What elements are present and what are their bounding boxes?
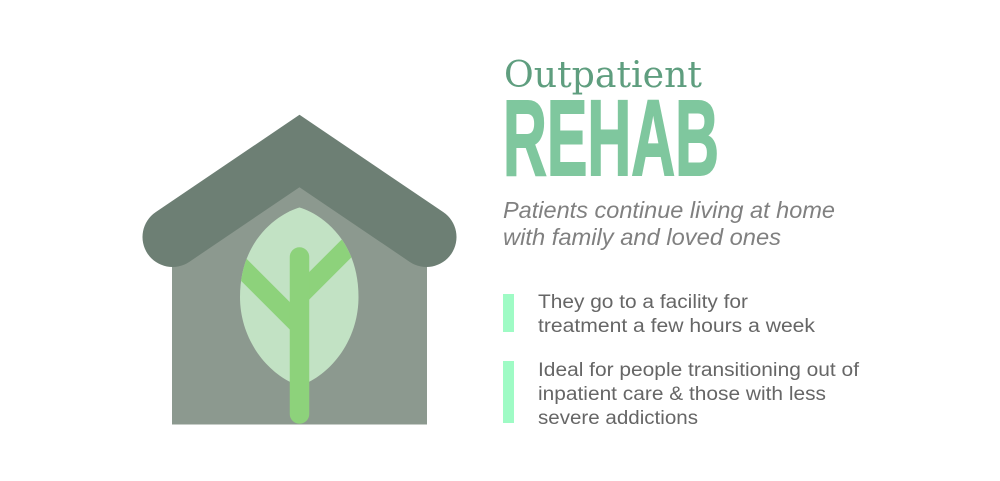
subtitle: with family and loved ones <box>503 224 782 250</box>
subtitle <box>503 197 835 250</box>
bullet 2 <box>503 360 860 429</box>
bullet text 2 <box>538 360 860 429</box>
bullet marker 1 <box>503 294 514 332</box>
title line: Outpatient: Outpatient <box>504 55 703 96</box>
bullet text 2: inpatient care & those with less <box>538 384 826 405</box>
bullet text 2: severe addictions <box>538 408 698 429</box>
house body <box>172 160 427 424</box>
bullet text 1: treatment a few hours a week <box>538 316 816 337</box>
bullet 1 <box>503 292 816 337</box>
bullet marker 2 <box>503 361 514 423</box>
title <box>503 55 719 198</box>
tree trunk <box>290 257 309 414</box>
bullet text 2: Ideal for people transitioning out of <box>538 360 860 381</box>
leaf <box>240 208 358 386</box>
tree branches <box>241 240 352 330</box>
house roof <box>172 151 426 237</box>
title line: REHAB: REHAB <box>503 77 719 198</box>
subtitle: Patients continue living at home <box>503 197 835 223</box>
icon: house with tree <box>172 151 427 424</box>
bullet text 1 <box>538 292 816 337</box>
infographic canvas <box>142 60 860 424</box>
bullet text 1: They go to a facility for <box>538 292 749 313</box>
